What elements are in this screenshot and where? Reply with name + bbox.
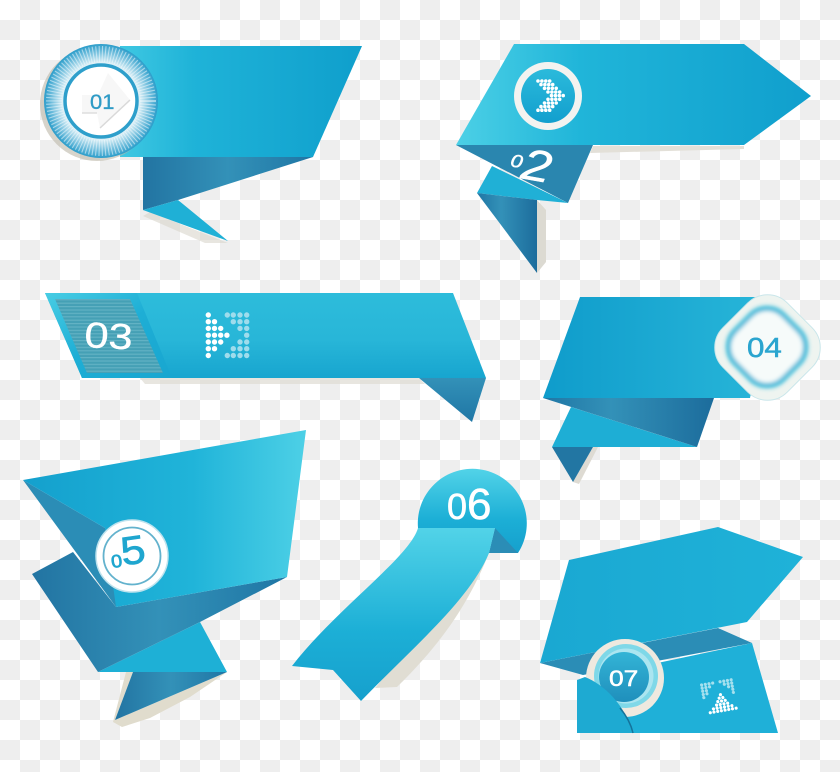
striped number box — [55, 299, 163, 373]
badge 07 — [586, 639, 664, 717]
banner 02 dark fold with number — [456, 138, 593, 203]
banner 06 — [292, 469, 527, 701]
banner 05 main panel — [23, 430, 306, 607]
banner 04 dark fold — [543, 398, 714, 447]
number 04: 04 — [747, 333, 782, 364]
badge number 01: 01 — [90, 90, 115, 114]
number 02: 0 — [509, 151, 524, 173]
banner 02 main arrow panel — [456, 44, 811, 145]
banner 05 tail — [115, 672, 227, 720]
banner 03 — [45, 293, 486, 422]
banner 01 — [40, 44, 362, 243]
banner 05 back band — [32, 552, 287, 672]
number 05: 0 — [110, 551, 124, 573]
ribbon body — [292, 528, 495, 701]
badge 05 — [96, 520, 168, 592]
number 06: 06 — [447, 480, 492, 529]
number 07: 07 — [609, 667, 638, 691]
banner 07 lower panel — [577, 643, 778, 733]
tab fold — [489, 528, 518, 553]
number 05: 5 — [118, 526, 148, 574]
dotted play icon — [208, 315, 247, 356]
banner 02 — [456, 44, 811, 273]
badge with dotted chevron — [514, 62, 582, 130]
banner 07 front flap — [577, 677, 632, 733]
banner 04 — [543, 283, 832, 484]
banner 03 left band — [45, 293, 172, 378]
dotted icon — [702, 680, 736, 713]
banner 05 — [23, 430, 306, 727]
banner 01 tail — [143, 200, 228, 241]
badge 01 — [40, 44, 158, 161]
banner 07 main panel — [540, 527, 803, 663]
banner 03 main panel — [45, 293, 486, 378]
banner 02 light flap — [477, 166, 568, 203]
banner 04 flap — [552, 407, 697, 447]
number 02: 2 — [517, 139, 555, 193]
banner 01 lower fold — [143, 157, 313, 210]
banner 04 main panel — [543, 297, 770, 398]
banner 07 dark fold — [540, 628, 752, 675]
number tab — [418, 469, 527, 553]
banner 01 main panel — [120, 46, 362, 157]
badge 04 — [703, 283, 832, 412]
banner 05 flap — [98, 622, 227, 672]
banner 05 inner dark fold — [23, 480, 125, 607]
banner 07 — [540, 527, 803, 733]
banner 03 fold — [419, 378, 486, 422]
banner 02 tail — [477, 193, 537, 273]
banner 04 tail — [552, 447, 593, 482]
number 03: 03 — [84, 315, 134, 358]
